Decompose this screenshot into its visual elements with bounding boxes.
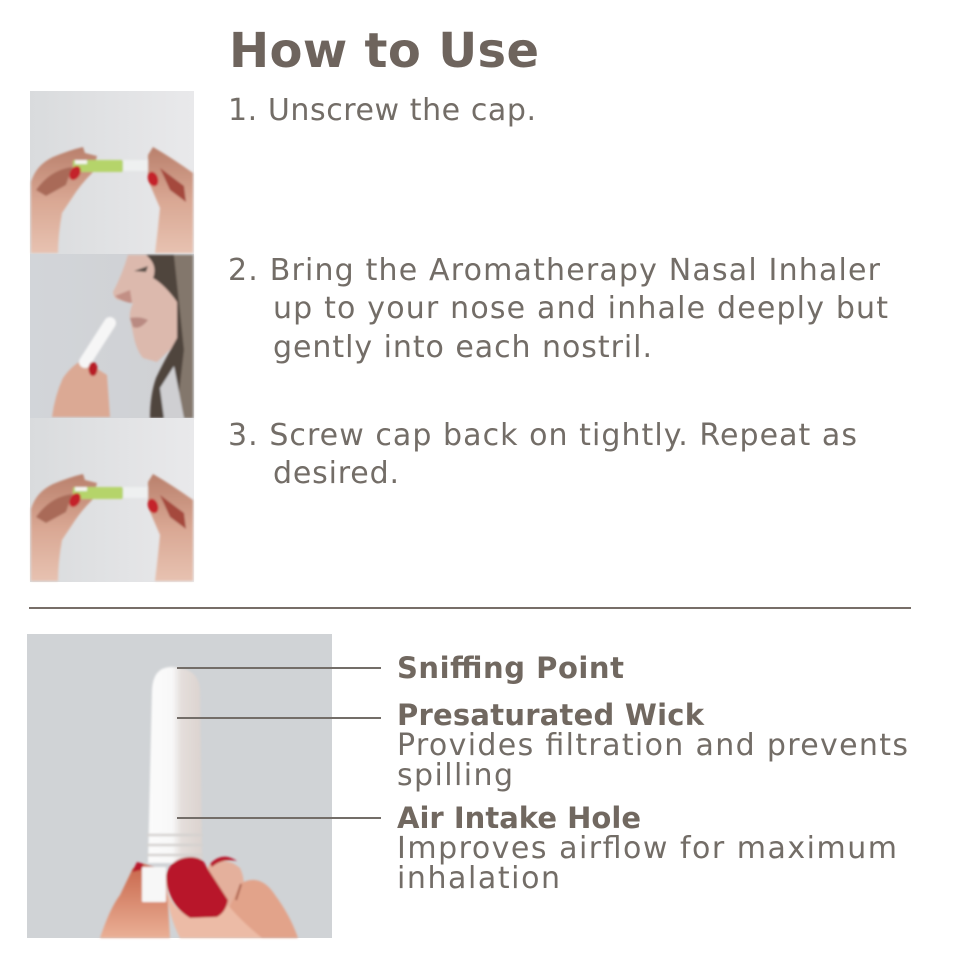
title: How to Use [229, 23, 539, 79]
callout line: sniffing point [177, 667, 381, 669]
step 1 text: 1. Unscrew the cap. [228, 93, 536, 128]
step 2 text [228, 253, 888, 365]
step 2 text: gently into each nostril. [273, 330, 652, 365]
photo: unscrew the cap [30, 91, 194, 254]
label: air intake hole: Improves airflow for maximum [397, 831, 897, 866]
step 3 text [228, 418, 857, 491]
label: sniffing point: Sniffing Point [397, 651, 624, 685]
step 2 text: up to your nose and inhale deeply but [273, 291, 888, 326]
callout line: presaturated wick [177, 717, 381, 719]
label: air intake hole [397, 801, 897, 896]
photo: screw cap back on [30, 418, 194, 582]
label: air intake hole: inhalation [397, 861, 560, 896]
callout line: air intake hole [177, 817, 381, 819]
step 3 text: 3. Screw cap back on tightly. Repeat as [228, 418, 857, 453]
photo: inhale through the nose [30, 254, 194, 418]
photo: inhaler anatomy [27, 634, 332, 938]
label: presaturated wick: Presaturated Wick [397, 698, 705, 732]
label: air intake hole: Air Intake Hole [397, 801, 641, 835]
label: presaturated wick [397, 698, 908, 793]
step 3 text: desired. [273, 456, 399, 491]
label: presaturated wick: spilling [397, 758, 513, 793]
label: presaturated wick: Provides filtration and prevents [397, 728, 908, 763]
step 2 text: 2. Bring the Aromatherapy Nasal Inhaler [228, 253, 881, 288]
